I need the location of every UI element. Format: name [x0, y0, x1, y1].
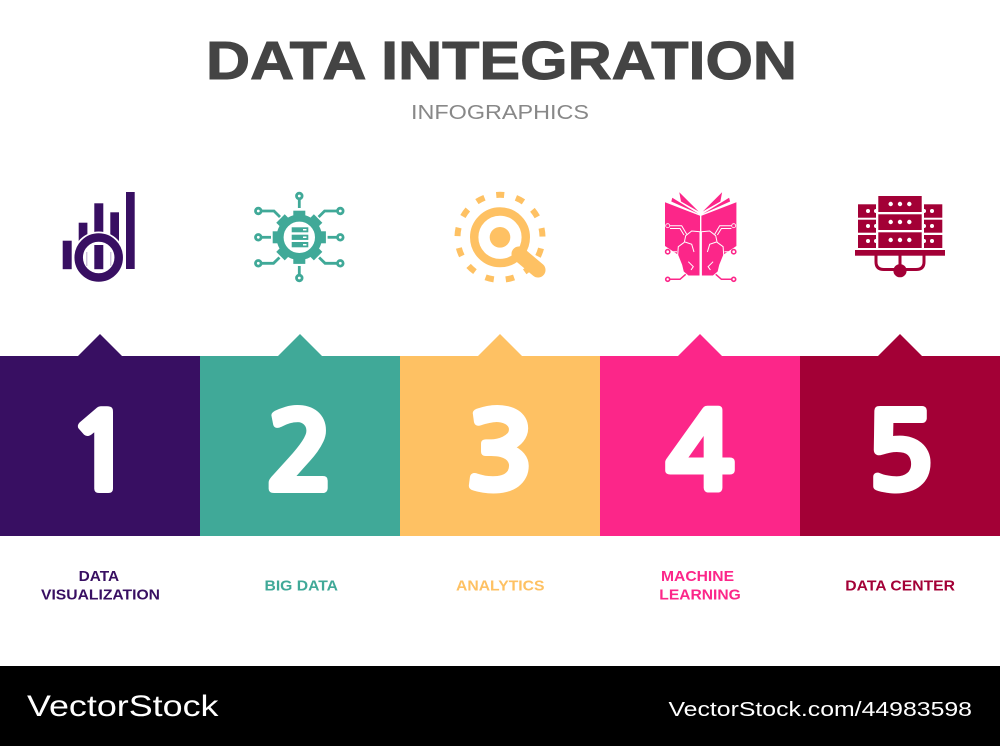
- icon: analytics magnifier: [458, 195, 542, 280]
- step 5 number: 5: [865, 401, 935, 506]
- label: big data: BIG DATA: [264, 578, 338, 594]
- step 4 number: 4: [665, 401, 735, 506]
- footer logo: VectorStock: [27, 690, 220, 723]
- label: data visualization: [41, 568, 160, 604]
- step 5 panel: [800, 334, 1000, 536]
- icon: data visualization: [63, 192, 135, 284]
- icon: big data gear: [255, 193, 343, 281]
- subtitle: INFOGRAPHICS: [411, 102, 589, 124]
- label: machine learning: MACHINE: [661, 568, 734, 585]
- step 4 panel: [600, 334, 800, 536]
- icon: data center servers: [855, 196, 945, 277]
- step 1 panel: [0, 334, 200, 536]
- label: machine learning: [659, 568, 741, 604]
- step 3 number: 3: [465, 401, 535, 506]
- label: data visualization: DATA: [79, 568, 119, 585]
- label: data center: DATA CENTER: [845, 578, 955, 594]
- icon: machine learning book and brain: [665, 192, 736, 281]
- label: data visualization: VISUALIZATION: [41, 586, 160, 604]
- step 3 panel: [400, 334, 600, 536]
- footer image id: VectorStock.com/44983598: [668, 699, 972, 721]
- step 2 number: 2: [265, 401, 335, 506]
- title: DATA INTEGRATION: [206, 31, 797, 91]
- step 2 panel: [200, 334, 400, 536]
- footer bar: [0, 666, 1000, 746]
- label: machine learning: LEARNING: [659, 586, 741, 604]
- step 1 number: 1: [66, 401, 136, 506]
- label: analytics: ANALYTICS: [456, 578, 544, 594]
